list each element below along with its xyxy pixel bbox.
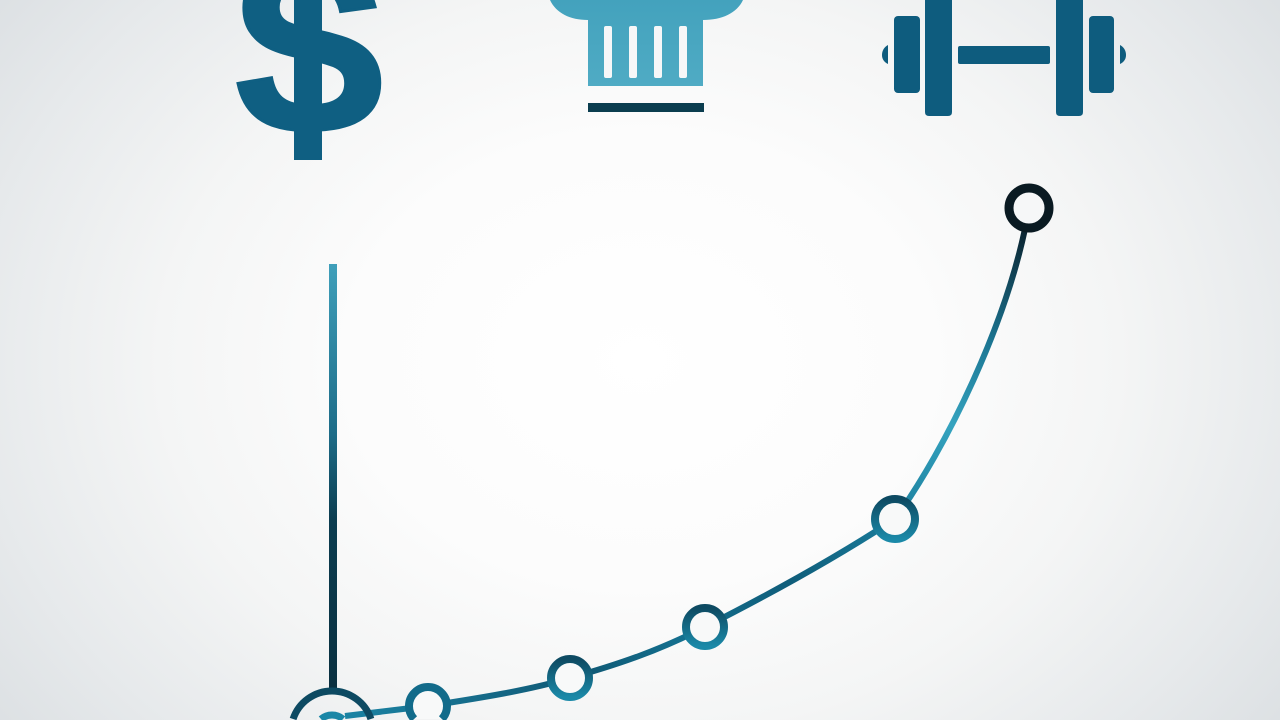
vertical axis line — [329, 264, 337, 688]
origin target rings — [293, 691, 371, 719]
growth curve — [345, 208, 1029, 716]
icon: pillar column — [550, 0, 743, 112]
curve nodes — [409, 499, 915, 719]
icon: dumbbell — [882, 0, 1126, 116]
end node — [1009, 188, 1049, 228]
